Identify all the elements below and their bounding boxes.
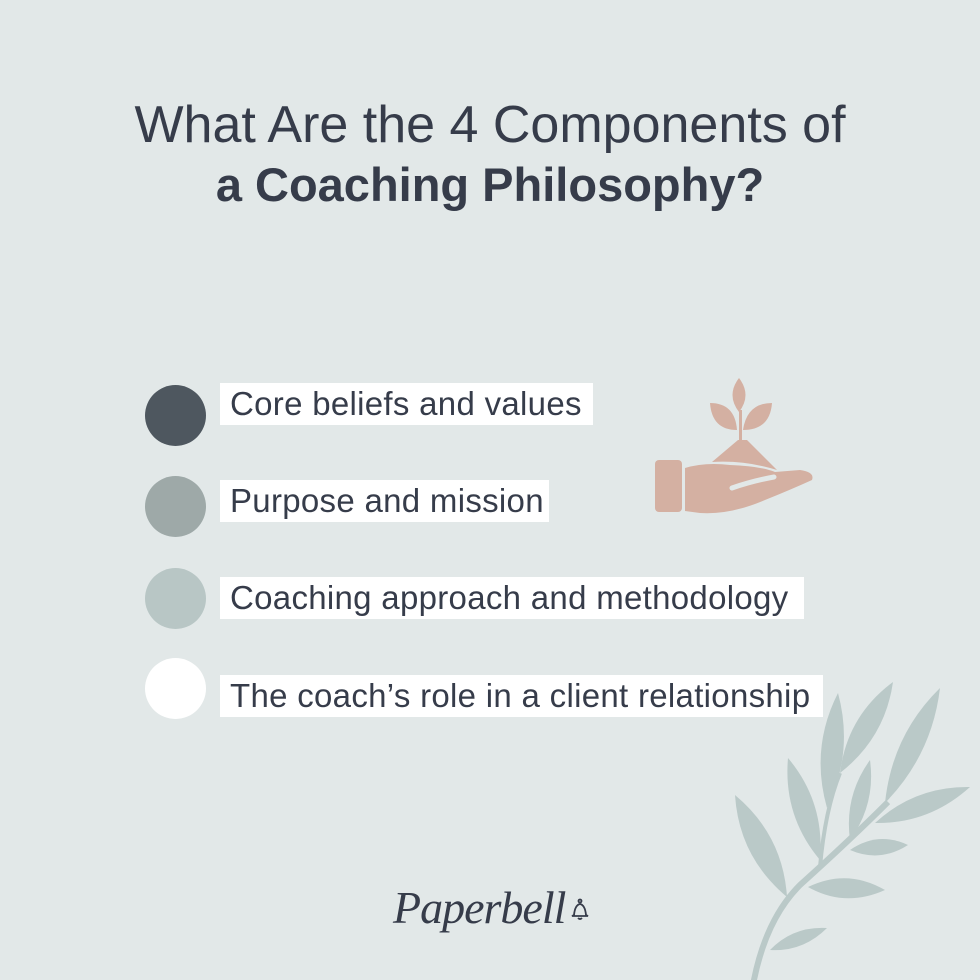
title bbox=[134, 96, 846, 211]
item 4 bbox=[145, 658, 823, 719]
title: What Are the 4 Components of bbox=[134, 96, 846, 154]
logo: Paperbell bbox=[393, 882, 565, 933]
item 1 bbox=[145, 383, 593, 446]
title: a Coaching Philosophy? bbox=[216, 158, 764, 211]
item 2: Purpose and mission bbox=[230, 482, 544, 519]
item 4: The coach’s role in a client relationship bbox=[230, 677, 810, 714]
item 3: Coaching approach and methodology bbox=[230, 579, 788, 616]
item 1: Core beliefs and values bbox=[230, 385, 582, 422]
item 3 bbox=[145, 568, 804, 629]
item 2 bbox=[145, 476, 549, 537]
